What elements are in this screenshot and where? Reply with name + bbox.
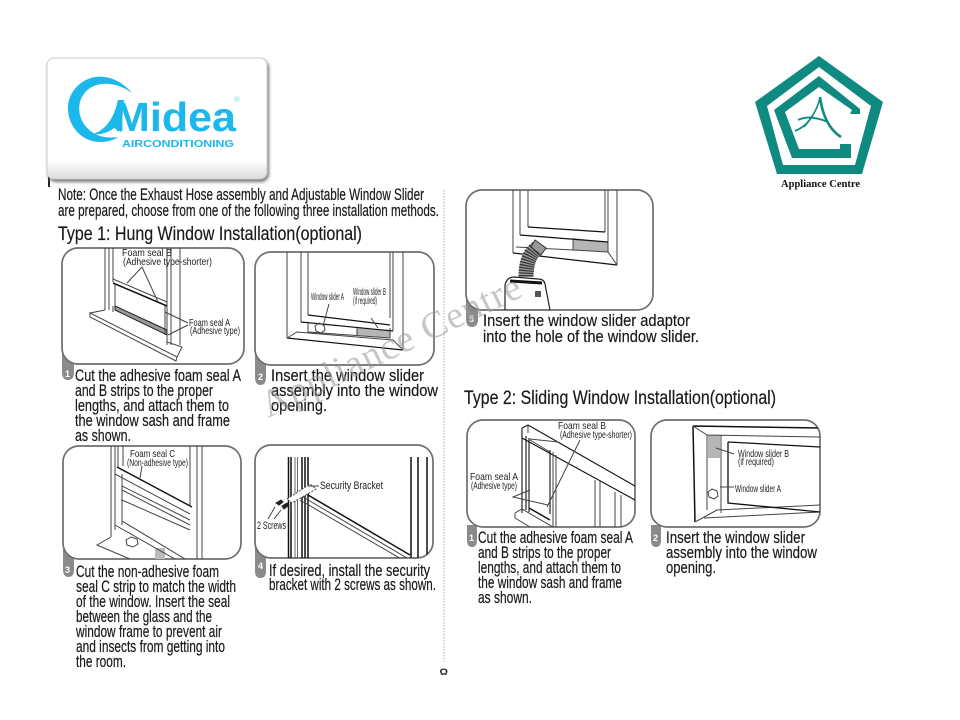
label: foam seal B: (Adhesive type-shorter) xyxy=(560,429,632,441)
panel: type 2 step 1 foam seals xyxy=(467,420,635,547)
label: foam seal C: (Non-adhesive type) xyxy=(127,457,188,469)
heading: type 1: Type 1: Hung Window Installation(optional) xyxy=(58,224,362,245)
text: step 1: the window sash and frame xyxy=(75,412,230,430)
panel: type 2 step 2 window slider: 2 xyxy=(653,533,658,543)
icon: Midea swoosh xyxy=(93,100,124,134)
text: step 2: assembly into the window xyxy=(271,382,438,400)
label: foam seal A: Foam seal A xyxy=(470,471,518,483)
text: step 3 xyxy=(75,563,236,671)
label: window slider B: (if required) xyxy=(738,456,774,468)
text: step 2: opening. xyxy=(271,397,327,415)
label: foam seal B xyxy=(122,247,212,268)
logo: Appliance Centre xyxy=(755,56,883,190)
note text: are prepared, choose from one of the following three installation methods. xyxy=(58,202,439,220)
text: step 1 xyxy=(75,367,241,445)
panel: step 1 foam seals xyxy=(62,247,244,380)
text: step 4 xyxy=(269,562,436,594)
panel: step 3 foam seal C: 3 xyxy=(65,565,70,575)
panel: step 2 window slider: Window slider B xyxy=(353,287,386,298)
panel: step 2 window slider: 2 xyxy=(258,372,263,382)
page number: 8 xyxy=(439,665,448,684)
text: type 2 step 2: Insert the window slider xyxy=(666,529,805,547)
text: step 2 xyxy=(271,367,438,415)
text: type 2 step 1: as shown. xyxy=(478,589,532,607)
text: type 2 step 1: lengths, and attach them to xyxy=(478,559,621,577)
panel: step 4 security bracket xyxy=(255,445,433,578)
text: step 5: into the hole of the window slider. xyxy=(483,328,699,346)
text: type 2 step 2 xyxy=(666,529,817,577)
panel: step 5 slider adaptor: 5 xyxy=(469,314,474,324)
text: step 1: and B strips to the proper xyxy=(75,382,213,400)
watermark: Appliance Centre xyxy=(254,266,529,426)
label: foam seal C: Foam seal C xyxy=(130,448,175,460)
label: foam seal B: Foam seal B xyxy=(558,420,606,432)
text: type 2 step 1 xyxy=(478,529,633,607)
label: security bracket: Security Bracket xyxy=(320,480,383,492)
label: 2 screws: 2 Screws xyxy=(257,520,286,532)
Midea wordmark: Midea xyxy=(114,94,237,140)
text: step 4: bracket with 2 screws as shown. xyxy=(269,576,436,594)
text: step 1: as shown. xyxy=(75,427,131,445)
label: foam seal A: Foam seal A xyxy=(189,317,230,329)
text: step 2: Insert the window slider xyxy=(271,367,424,385)
registered mark: ® xyxy=(234,95,240,104)
label: foam seal A: (Adhesive type) xyxy=(471,480,517,492)
label: foam seal A xyxy=(470,471,518,492)
panel: step 1 foam seals: 1 xyxy=(65,369,70,379)
text: step 3: seal C strip to match the width xyxy=(76,578,236,596)
cut-off heading behind logo xyxy=(48,176,50,187)
text: step 5: Insert the window slider adaptor xyxy=(483,312,690,330)
panel: type 2 step 1 foam seals: 1 xyxy=(469,533,474,543)
label: foam seal A xyxy=(189,317,240,337)
panel: step 2 window slider: Window slider A xyxy=(311,292,344,303)
text: step 3: window frame to prevent air xyxy=(75,623,222,641)
icon: inner C xyxy=(774,76,860,158)
label: foam seal B: (Adhesive type-shorter) xyxy=(123,256,212,268)
panel: type 2 step 2 window slider xyxy=(651,420,820,547)
heading: type 2: Type 2: Sliding Window Installation(optional) xyxy=(464,388,776,409)
tagline: AIRCONDITIONING xyxy=(122,138,234,150)
label: window slider B xyxy=(353,287,386,307)
icon: Midea crescent xyxy=(68,77,132,142)
logo: Midea xyxy=(47,58,269,182)
text: type 2 step 2: assembly into the window xyxy=(666,544,817,562)
text: step 3: the room. xyxy=(76,653,126,671)
panel: step 5 slider adaptor xyxy=(466,190,653,327)
icon: script A xyxy=(795,97,841,137)
text: type 2 step 1: and B strips to the proper xyxy=(478,544,611,562)
text: type 2 step 1: Cut the adhesive foam seal A xyxy=(478,529,633,547)
brand name: Appliance Centre xyxy=(781,178,860,190)
label: window slider A: Window slider A xyxy=(735,483,781,495)
label: foam seal B: Foam seal B xyxy=(122,247,172,259)
note text xyxy=(58,186,439,220)
label: window slider B xyxy=(738,448,789,468)
divider xyxy=(443,190,445,662)
label: window slider B: (if required) xyxy=(353,296,377,307)
text: step 3: Cut the non-adhesive foam xyxy=(76,563,219,581)
note text: Note: Once the Exhaust Hose assembly and Adjustable Window Slider xyxy=(58,186,424,204)
text: step 1: lengths, and attach them to xyxy=(75,397,229,415)
panel: step 3 foam seal C xyxy=(63,446,241,577)
text: step 5 xyxy=(483,312,699,346)
text: step 3: of the window. Insert the seal xyxy=(76,593,230,611)
label: foam seal B xyxy=(558,420,632,441)
label: window slider B: Window slider B xyxy=(738,448,789,460)
icon: teal pentagon xyxy=(755,56,883,174)
label: foam seal A: (Adhesive type) xyxy=(190,325,240,337)
label: foam seal C xyxy=(127,448,188,469)
text: step 1: Cut the adhesive foam seal A xyxy=(75,367,241,385)
text: step 3: and insects from getting into xyxy=(76,638,225,656)
text: step 3: between the glass and the xyxy=(76,608,212,626)
text: type 2 step 1: the window sash and frame xyxy=(478,574,622,592)
panel: step 2 window slider xyxy=(255,252,434,385)
text: type 2 step 2: opening. xyxy=(666,559,716,577)
panel: step 4 security bracket: 4 xyxy=(258,561,263,571)
text: step 4: If desired, install the security xyxy=(269,562,431,580)
